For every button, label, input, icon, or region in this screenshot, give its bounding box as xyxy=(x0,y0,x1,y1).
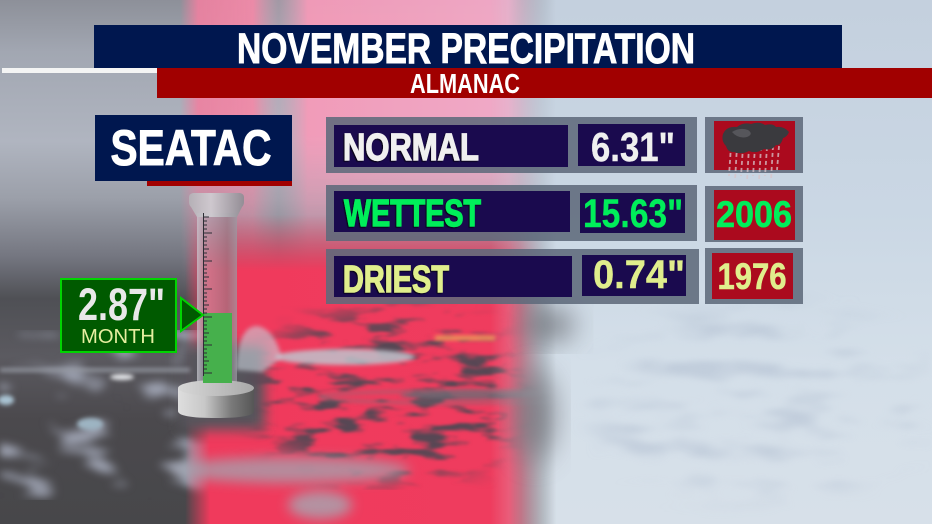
callout: month total: MONTH xyxy=(81,326,155,348)
title banner xyxy=(94,25,842,73)
gauge funnel cap xyxy=(189,193,244,217)
callout: month total xyxy=(61,279,176,352)
station label: SeaTac xyxy=(95,115,292,186)
callout: month total: 2.87" xyxy=(78,279,165,330)
row: driest: 0.74" xyxy=(593,253,685,297)
station label: SeaTac: SEATAC xyxy=(110,120,272,176)
row: driest: DRIEST xyxy=(343,259,449,301)
year: wettest: 2006 xyxy=(716,194,792,235)
row: normal: NORMAL xyxy=(343,127,479,169)
row: wettest: WETTEST xyxy=(344,193,481,235)
year: driest: 1976 xyxy=(718,256,786,297)
gauge water level xyxy=(203,313,232,383)
subtitle banner xyxy=(2,68,932,99)
rain gauge xyxy=(178,193,254,418)
subheading: Almanac: ALMANAC xyxy=(410,68,520,99)
year: driest xyxy=(705,248,803,304)
row: wettest xyxy=(326,185,697,241)
gauge base xyxy=(178,380,254,418)
row: driest xyxy=(326,249,699,304)
year: wettest xyxy=(705,186,803,242)
row: normal xyxy=(326,117,697,173)
gauge scale ticks xyxy=(204,213,212,383)
icon: rain cloud xyxy=(705,117,803,181)
row: wettest: 15.63" xyxy=(583,192,683,236)
gauge tube xyxy=(197,213,237,385)
arrow: pointer to water level xyxy=(181,298,203,331)
water bubble xyxy=(236,326,282,372)
row: normal: 6.31" xyxy=(591,124,675,170)
heading: November Precipitation: NOVEMBER PRECIPITATION xyxy=(237,25,695,73)
